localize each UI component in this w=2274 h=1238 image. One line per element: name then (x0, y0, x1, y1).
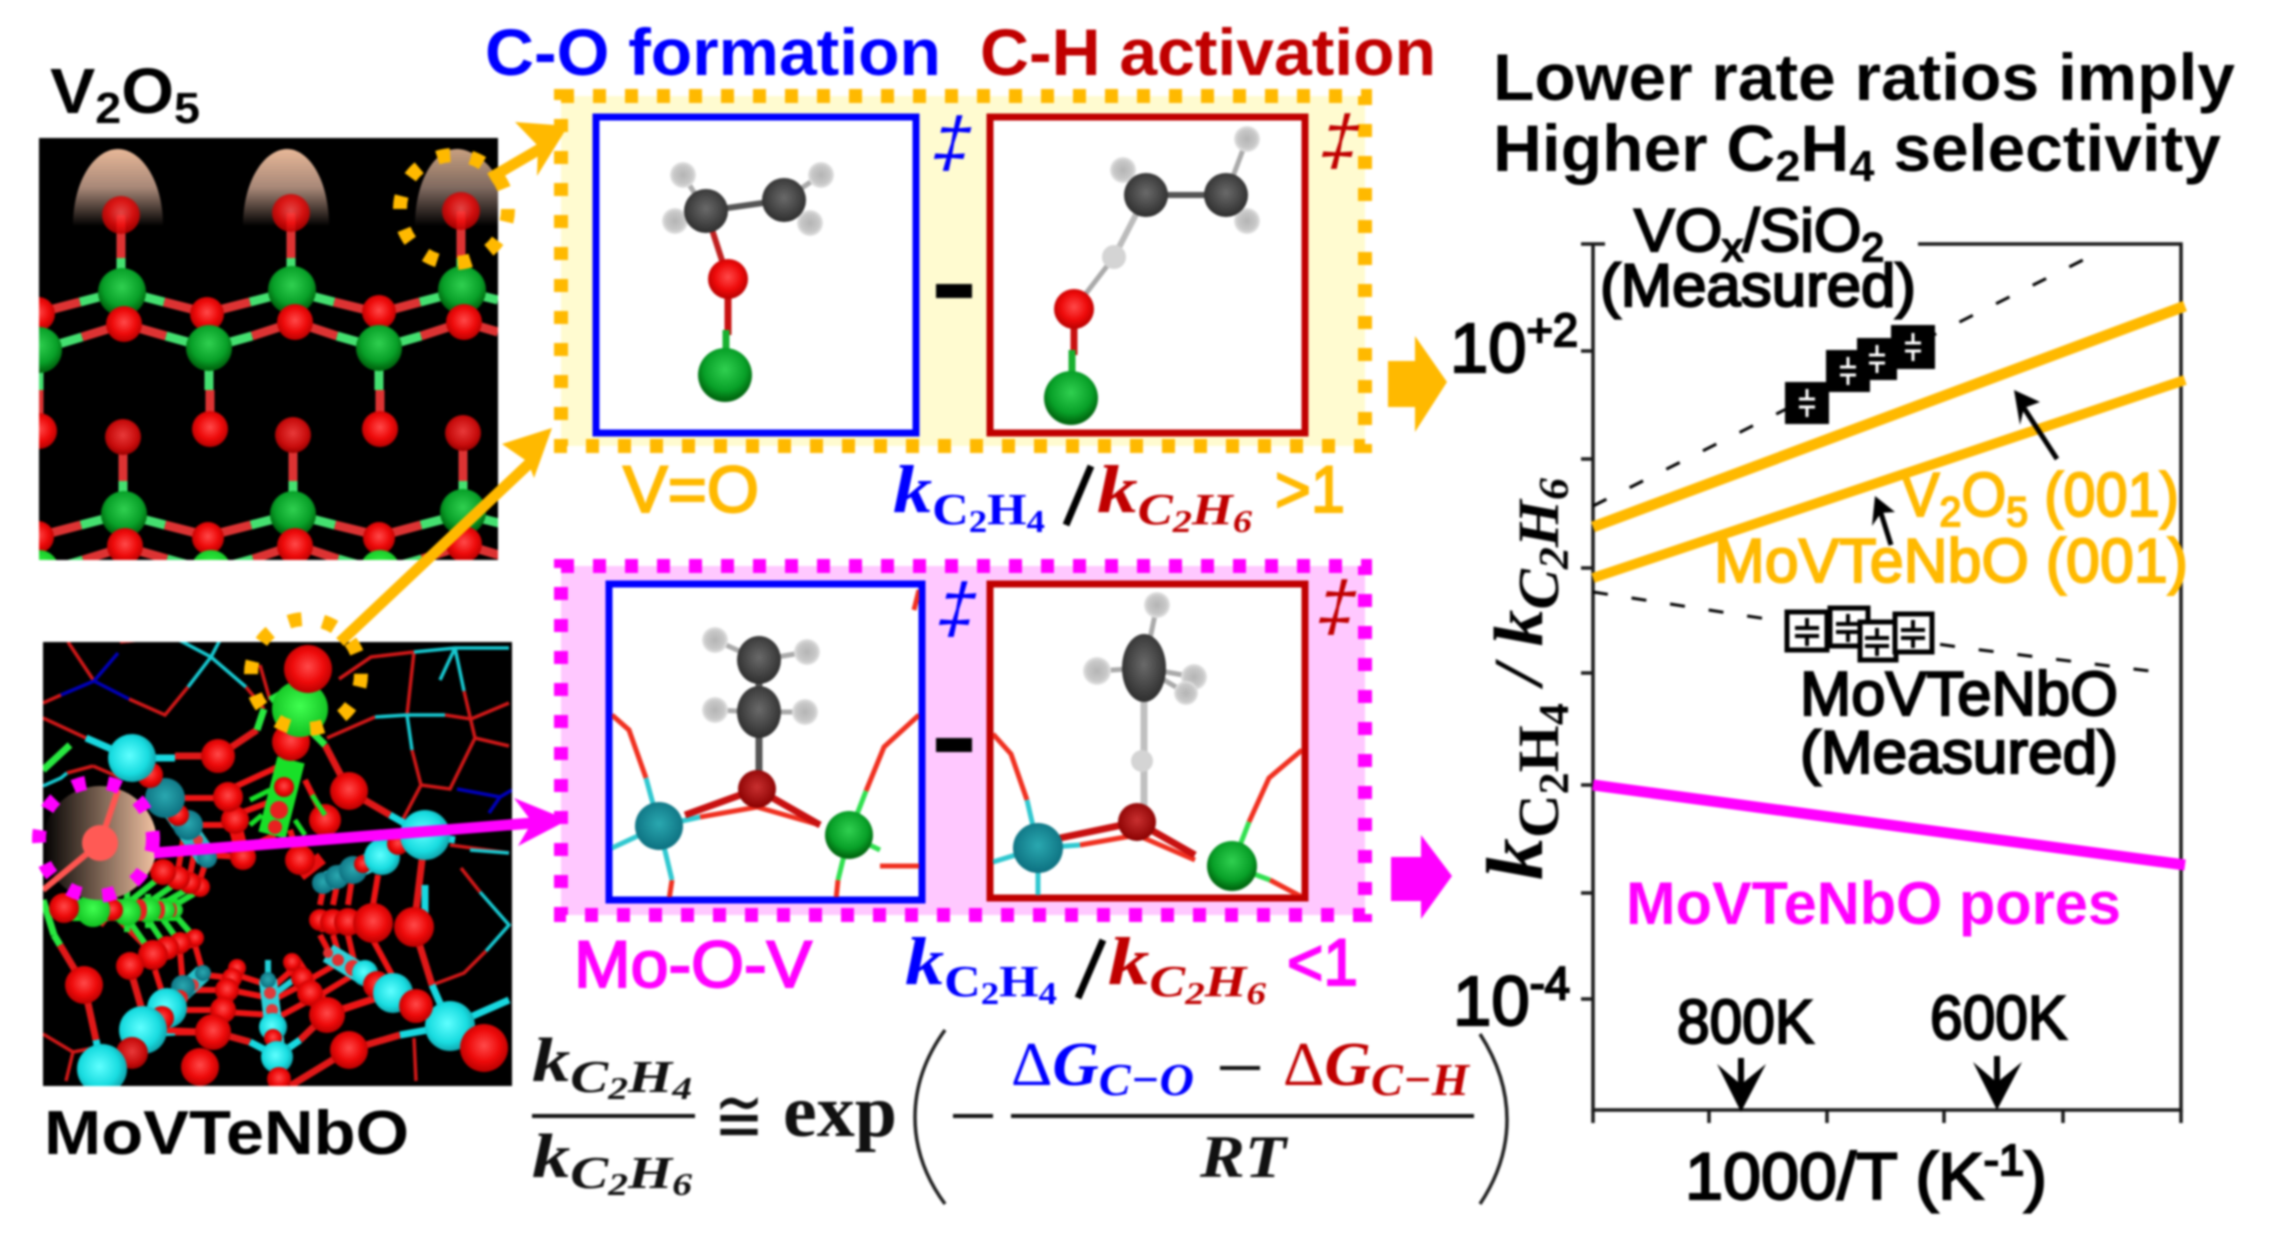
left fraction: 2 (607, 1166, 628, 1202)
label: VOx/SiO2 measured (1600, 197, 1916, 319)
y tick label: 10-4: 10 (1453, 962, 1531, 1040)
panel: V2O5 crystal structure (16, 138, 499, 590)
large foreground atoms (65, 645, 508, 1094)
SW red row (184, 931, 194, 950)
dashed circle: V=O site on MoVTeNbO (251, 619, 361, 729)
ratio: k C2H4 / k C2H6 < 1: H (999, 957, 1039, 1006)
y axis title: 2 (1532, 772, 1578, 794)
numerator: delta G C-O minus delta G C-H: ΔG (1011, 1031, 1097, 1099)
ratio: k C2H4 / k C2H6 < 1: C (944, 957, 981, 1006)
arrow: 800K marker (1717, 1058, 1766, 1112)
SSE red row (292, 962, 327, 1015)
ratio: k C2H4 / k C2H6 < 1: C (1149, 957, 1186, 1006)
double dagger: ‡ (1312, 102, 1370, 180)
thick bonds (43, 672, 509, 1086)
exp: exp (783, 1071, 897, 1153)
ratio: k C2H4 / k C2H6 < 1: H (1204, 957, 1249, 1006)
heading: lower rate ratios (1493, 40, 2235, 191)
left fraction: 4 (671, 1070, 692, 1106)
y axis title: H (1506, 498, 1571, 548)
chart: rate ratio vs inverse temperature (1450, 197, 2188, 1213)
arrow: 600K marker (1973, 1056, 2022, 1110)
box: C-O transition state (596, 117, 916, 433)
approximately equal: ≅ (714, 1071, 764, 1160)
pointer arrow to MoVTeNbO line (1872, 496, 1895, 545)
x axis title: ) (2024, 1139, 2047, 1213)
line: V2O5 (001) (1593, 306, 2185, 527)
N red cluster (292, 850, 322, 875)
double dagger: ‡ (929, 570, 987, 648)
heading: C-H activation: C-H activation (980, 15, 1436, 89)
S cyan row (268, 980, 277, 1057)
y axis title: C (1506, 794, 1571, 838)
heading: lower rate ratios: Higher C (1493, 111, 1768, 185)
y axis title: k (1472, 840, 1560, 880)
minus (953, 1114, 993, 1118)
lower layer bonds (50, 449, 500, 562)
ratio: k C2H4 / k C2H6 < 1 (905, 923, 1358, 1011)
arrow: pore site to Mo-O-V panel (154, 798, 568, 853)
box: C-H transition state (990, 117, 1305, 433)
ratio: k C2H4 / k C2H6 < 1: <1 (1287, 925, 1358, 999)
y axis title: H (1506, 725, 1571, 772)
left fraction: 6 (672, 1166, 692, 1202)
numerator: delta G C-O minus delta G C-H (1011, 1031, 1470, 1105)
y tick label: 10+2: +2 (1526, 304, 1578, 356)
label: VOx/SiO2 measured: x (1722, 226, 1743, 270)
label: MoVTeNbO: MoVTeNbO (44, 1099, 409, 1168)
SSW red row (216, 984, 240, 1002)
minus sign (936, 284, 972, 298)
label: V2O5 (001): O (1961, 461, 2006, 530)
label: VOx/SiO2 measured: (Measured) (1600, 252, 1916, 319)
box: C-O transition state on Mo-O-V (609, 584, 922, 900)
y axis title: 4 (1532, 703, 1578, 725)
left fraction: k (532, 1027, 563, 1095)
double dagger: ‡ (1309, 568, 1367, 646)
ratio: k C2H4 / k C2H6 > 1: 4 (1027, 503, 1045, 539)
active-site glows (73, 149, 498, 226)
label: V2O5: 5 (174, 84, 200, 133)
x axis title: 1000/T (K (1685, 1139, 1974, 1213)
label: V=O: V=O (623, 452, 759, 526)
label: 600K: 600K (1930, 984, 2067, 1053)
label: VOx/SiO2 measured: VO (1634, 197, 1721, 264)
left fraction: H (627, 1051, 674, 1102)
arrow: MoVTeNbO site to V=O panel (340, 428, 552, 642)
ratio: k C2H4 / k C2H6 > 1 (893, 451, 1345, 539)
label: 800K: 800K (1677, 988, 1814, 1057)
thin wireframe background (43, 640, 512, 1081)
label: V2O5 (001): (001) (2028, 461, 2179, 530)
label: VOx/SiO2 measured: 2 (1861, 226, 1884, 270)
equation (532, 1027, 1507, 1204)
ratio: k C2H4 / k C2H6 < 1: 2 (1184, 975, 1205, 1011)
right parenthesis (1480, 1034, 1507, 1204)
upper layer bonds (38, 211, 498, 431)
panel: Mo-O-V transition states (561, 566, 1367, 915)
left parenthesis (915, 1030, 945, 1204)
heading: C-O formation: C-O formation (485, 15, 941, 89)
dashed fit: VOx/SiO2 measured (1593, 255, 2093, 506)
label: MoVTeNbO pores: MoVTeNbO pores (1626, 870, 2121, 937)
data: MoVTeNbO measured markers (1787, 608, 1932, 660)
axes and ticks (1581, 244, 2181, 1123)
W green row (70, 899, 178, 921)
y tick label: 10-4: -4 (1530, 957, 1570, 1009)
dashed fit: MoVTeNbO measured (1593, 592, 2166, 673)
ratio: k C2H4 / k C2H6 < 1: 4 (1039, 975, 1057, 1011)
panel: MoVTeNbO crystal structure (43, 640, 512, 1094)
NW red column (228, 830, 248, 843)
label: VOx/SiO2 measured: /SiO (1743, 197, 1861, 264)
label: V2O5: O (121, 55, 174, 127)
ratio: k C2H4 / k C2H6 > 1: 2 (969, 503, 987, 539)
pore rung bonds between atom rows (125, 765, 393, 1032)
pore-site glow (43, 786, 157, 900)
heading: lower rate ratios: selectivity (1875, 111, 2221, 185)
label: MoVTeNbO measured (1800, 660, 2118, 786)
left fraction (532, 1027, 695, 1202)
line: MoVTeNbO (001) (1593, 380, 2185, 578)
arrow: V2O5 site to V=O panel (490, 122, 568, 178)
left fraction: 2 (607, 1070, 628, 1106)
ratio: k C2H4 / k C2H6 < 1: k (905, 923, 939, 999)
NW red row (163, 872, 200, 887)
ratio: k C2H4 / k C2H6 > 1: C (932, 485, 969, 534)
data: VOx/SiO2 markers (1785, 325, 1935, 424)
heading: lower rate ratios: 4 (1849, 142, 1875, 191)
y axis title: C (1506, 568, 1571, 610)
minus sign (936, 738, 972, 752)
E red row (318, 929, 326, 934)
ratio: k C2H4 / k C2H6 < 1: 2 (981, 975, 999, 1011)
ratio: k C2H4 / k C2H6 > 1: H (987, 485, 1027, 534)
ratio: k C2H4 / k C2H6 > 1: >1 (1275, 452, 1345, 526)
numerator: delta G C-O minus delta G C-H: C−O (1099, 1054, 1194, 1105)
ratio: k C2H4 / k C2H6 > 1: k (893, 451, 927, 527)
double dagger: ‡ (924, 104, 982, 182)
line: MoVTeNbO pores (1593, 785, 2185, 865)
label: Mo-O-V: Mo-O-V (574, 927, 812, 1001)
dashed circle: V=O site on V2O5 (400, 155, 508, 263)
label: MoVTeNbO measured: MoVTeNbO (1800, 660, 2118, 729)
left fraction: C (570, 1051, 610, 1102)
numerator: delta G C-O minus delta G C-H: ΔG (1283, 1031, 1369, 1099)
box: C-H transition state on Mo-O-V (990, 584, 1305, 898)
heading: lower rate ratios: 2 (1775, 142, 1800, 191)
left fraction: H (627, 1147, 674, 1198)
NW teal row (165, 798, 207, 858)
y axis title: 2 (1532, 547, 1578, 570)
ratio: k C2H4 / k C2H6 > 1: H (1191, 485, 1235, 534)
label: V2O5 (001): V (1901, 461, 1942, 530)
pore atom rows (49, 723, 413, 1073)
left fraction: C (570, 1147, 610, 1198)
panel: V=O transition states (561, 96, 1370, 446)
label: MoVTeNbO (001): MoVTeNbO (001) (1714, 527, 2188, 596)
NE cyan row (323, 857, 382, 883)
label: V2O5 (001): 2 (1940, 488, 1961, 535)
denominator RT: RT (1199, 1124, 1289, 1190)
x axis title: -1 (1984, 1136, 2024, 1185)
label: MoVTeNbO measured: (Measured) (1800, 719, 2118, 786)
block arrow: orange (1388, 336, 1447, 432)
heading: lower rate ratios: H (1800, 111, 1849, 185)
dashed circle: Mo-O-V site (39, 782, 153, 896)
left fraction: k (532, 1123, 563, 1191)
heading: lower rate ratios: Lower rate ratios imply (1493, 40, 2235, 114)
ratio: k C2H4 / k C2H6 < 1: k (1108, 923, 1142, 999)
y tick label: 10+2: 10 (1450, 309, 1528, 387)
label: V2O5 (001): 5 (2006, 488, 2028, 535)
N green stack (272, 760, 291, 835)
y axis title: 6 (1532, 478, 1578, 500)
atoms (37, 190, 488, 562)
SSW teal row (186, 966, 210, 1000)
numerator: delta G C-O minus delta G C-H: C−H (1371, 1054, 1470, 1105)
label: V2O5: V (50, 55, 93, 127)
pointer arrow to V2O5 line (2014, 390, 2057, 459)
SE cyan row (322, 944, 364, 986)
ratio: k C2H4 / k C2H6 > 1: k (1097, 451, 1131, 527)
ratio: k C2H4 / k C2H6 > 1: 2 (1172, 503, 1192, 539)
block arrow: magenta (1391, 835, 1452, 919)
y axis title: / k (1481, 610, 1558, 703)
ratio: k C2H4 / k C2H6 < 1: 6 (1246, 975, 1266, 1011)
ratio: k C2H4 / k C2H6 > 1: 6 (1233, 503, 1252, 539)
ratio: k C2H4 / k C2H6 > 1: C (1138, 485, 1174, 534)
label: V2O5: 2 (95, 84, 121, 133)
